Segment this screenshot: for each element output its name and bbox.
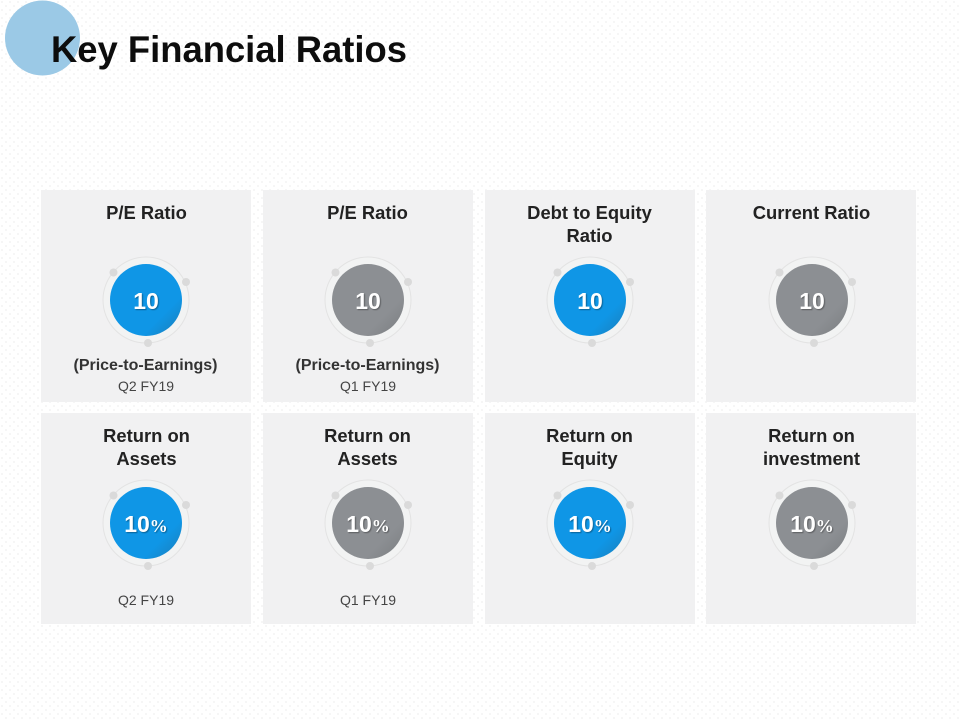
subtitle: Price-to-Earnings: (Price-to-Earnings) xyxy=(295,357,440,374)
period label: Q1 FY19 xyxy=(340,592,396,608)
period label: Q2 FY19 xyxy=(118,378,174,394)
panel: P/E Ratio Q1 FY19 xyxy=(263,190,473,402)
gauge: 10 blue xyxy=(547,257,634,347)
gauge: 10% gray: 10% xyxy=(790,511,834,537)
gauge: 10 blue xyxy=(103,257,190,347)
gauge: 10% blue xyxy=(547,480,634,570)
panel: P/E Ratio Q2 FY19 xyxy=(41,190,251,402)
gauge: 10% blue: 10% xyxy=(124,511,168,537)
heading: Return on Assets: Assets xyxy=(116,448,177,469)
icon: title accent circle xyxy=(5,0,80,76)
gauge: 10% gray: 10% xyxy=(346,511,390,537)
heading: Debt to Equity Ratio: Debt to Equity xyxy=(527,202,652,223)
heading: Return on Assets: Assets xyxy=(337,448,398,469)
heading: P/E Ratio: P/E Ratio xyxy=(106,202,187,223)
gauge: 10 gray xyxy=(769,257,856,347)
gauge: 10 gray: 10 xyxy=(355,288,381,314)
gauge: 10 blue: 10 xyxy=(133,288,159,314)
gauge: 10% gray xyxy=(325,480,412,570)
heading: Return on Assets: Return on xyxy=(103,425,190,446)
panel: Current Ratio xyxy=(706,190,916,402)
heading: P/E Ratio: P/E Ratio xyxy=(327,202,408,223)
gauge: 10% blue xyxy=(103,480,190,570)
gauge: 10% gray xyxy=(769,480,856,570)
panel: Return on investment xyxy=(706,413,916,624)
heading: Return on investment: investment xyxy=(763,448,860,469)
panel: Return on Assets Q2 FY19 xyxy=(41,413,251,624)
panel: Debt to Equity Ratio xyxy=(485,190,695,402)
gauge: 10% blue: 10% xyxy=(568,511,612,537)
heading: Current Ratio: Current Ratio xyxy=(753,202,870,223)
subtitle: Price-to-Earnings: (Price-to-Earnings) xyxy=(73,357,218,374)
period label: Q1 FY19 xyxy=(340,378,396,394)
heading: Return on Assets: Return on xyxy=(324,425,411,446)
gauge: 10 gray xyxy=(325,257,412,347)
heading: Return on Equity: Equity xyxy=(561,448,618,469)
period label: Q2 FY19 xyxy=(118,592,174,608)
title: Key Financial Ratios xyxy=(51,29,407,70)
gauge: 10 gray: 10 xyxy=(799,288,825,314)
heading: Return on Equity: Return on xyxy=(546,425,633,446)
panel: Return on Assets Q1 FY19 xyxy=(263,413,473,624)
heading: Debt to Equity Ratio: Ratio xyxy=(567,225,612,246)
panel: Return on Equity xyxy=(485,413,695,624)
heading: Return on investment: Return on xyxy=(768,425,855,446)
gauge: 10 blue: 10 xyxy=(577,288,603,314)
